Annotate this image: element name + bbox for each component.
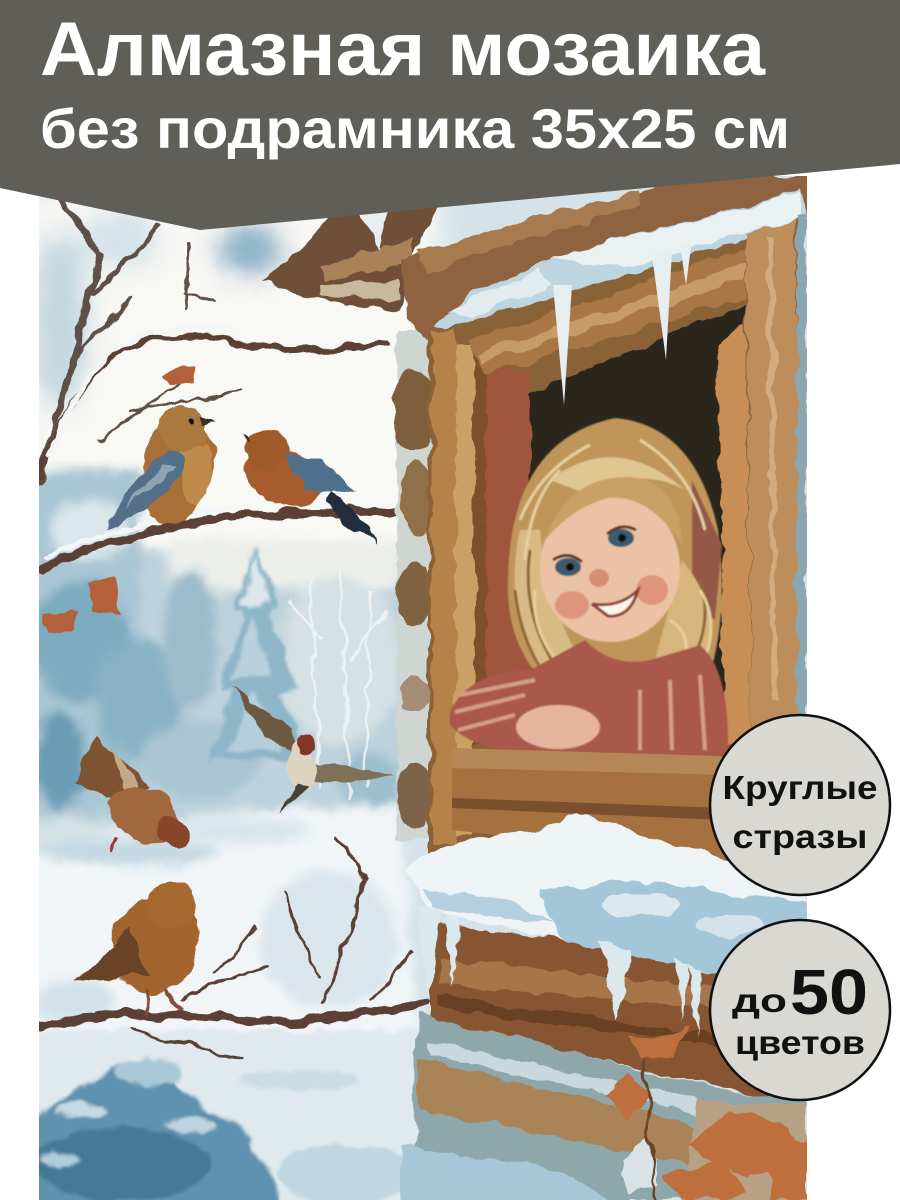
badge: round rhinestones: Круглые <box>722 769 878 806</box>
bird 2 <box>238 430 380 542</box>
badge: up to 50 colours: цветов <box>735 1024 865 1061</box>
window sill <box>452 748 725 862</box>
window: left posts <box>432 330 486 845</box>
roof beams <box>262 176 807 345</box>
logs under window <box>400 925 807 1200</box>
window: dark interior <box>528 305 746 693</box>
snow on ledge <box>405 812 807 975</box>
badge: up to 50 colours: 50 <box>790 956 868 1028</box>
bird 4 <box>72 735 191 856</box>
sky <box>20 190 440 570</box>
snowy fir tree <box>210 545 305 760</box>
girl <box>450 418 728 755</box>
badge: round rhinestones: стразы <box>732 818 868 855</box>
nose and smile <box>589 569 609 587</box>
bare white trees <box>290 570 385 800</box>
bottom snow and bushes <box>30 1030 430 1200</box>
orange leaves on left <box>45 368 195 635</box>
autumn leaves lower right <box>605 1025 807 1200</box>
roof icicles <box>553 240 692 405</box>
subtitle: без подрамника 35х25 см <box>40 97 790 160</box>
badge: round rhinestones <box>710 715 890 895</box>
bird 5 <box>78 880 212 1015</box>
bird 3 flying <box>232 688 395 815</box>
painting: winter scene with girl in window <box>20 176 807 1200</box>
branches <box>40 336 430 1060</box>
eyes <box>555 558 581 576</box>
window: right post <box>745 220 803 730</box>
snow ground <box>30 807 420 1060</box>
face <box>540 494 680 642</box>
upper-left tree trunks <box>40 200 240 480</box>
window backing <box>428 215 807 870</box>
window: inner right shutter <box>718 325 752 745</box>
header banner <box>0 0 900 230</box>
bird 1 <box>106 405 225 532</box>
snow on branches <box>44 344 144 560</box>
sweater <box>450 640 728 755</box>
forest background <box>30 470 410 820</box>
icicles <box>359 212 388 250</box>
window: red shutter <box>485 370 530 745</box>
title: Алмазная мозаика <box>40 7 766 92</box>
ledge icicles <box>415 905 704 1040</box>
hair <box>507 417 722 670</box>
fringe <box>545 477 682 545</box>
badge: up to 50 colours: до <box>732 982 787 1019</box>
hands <box>516 705 600 749</box>
logs on cabin corner <box>392 329 433 842</box>
window: top frame <box>470 248 745 375</box>
badge: up to 50 colours <box>710 920 890 1100</box>
